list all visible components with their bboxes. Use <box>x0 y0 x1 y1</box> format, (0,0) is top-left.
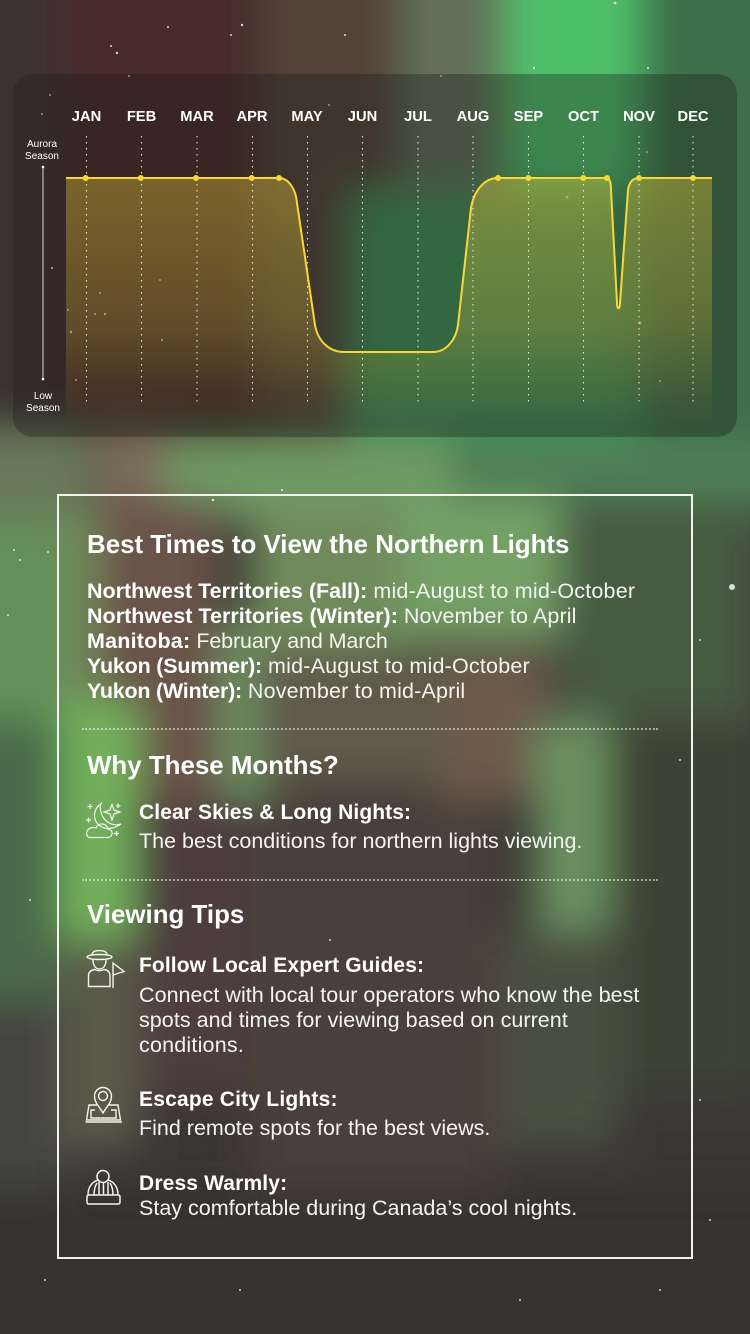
season axis: Low <box>34 391 53 402</box>
icon: map pin <box>86 1086 122 1123</box>
regional viewing dates: Northwest Territories (Winter): November to April <box>87 604 576 628</box>
reason: clear skies: Clear Skies & Long Nights: <box>139 801 411 824</box>
regional viewing dates: Manitoba: February and March <box>87 629 388 653</box>
month guide lines <box>86 136 693 406</box>
month labels: FEB <box>127 109 156 125</box>
heading: viewing tips: Viewing Tips <box>87 901 244 929</box>
heading: why these months: Why These Months? <box>87 752 339 780</box>
tip: dress warmly <box>139 1172 577 1220</box>
data points <box>83 175 696 181</box>
month labels <box>72 109 709 125</box>
icon: winter hat <box>86 1170 121 1205</box>
icon: guide with flag <box>86 950 125 988</box>
tip: follow local expert guides: conditions. <box>139 1033 244 1057</box>
regional viewing dates: Yukon (Summer): mid-August to mid-October <box>87 654 530 678</box>
month labels: APR <box>236 109 268 125</box>
month labels: JUL <box>404 109 432 125</box>
month labels: NOV <box>623 109 655 125</box>
season axis <box>25 139 60 414</box>
area under the curve <box>66 178 712 425</box>
season curve line <box>66 178 712 352</box>
month labels: SEP <box>514 109 543 125</box>
tip: escape city lights: Find remote spots for the best views. <box>139 1116 490 1140</box>
reason: clear skies <box>139 801 582 853</box>
heading: best times: Best Times to View the Northern Lights <box>87 531 569 559</box>
icon: moon, stars and cloud <box>86 802 122 838</box>
tip: follow local expert guides <box>139 954 640 1057</box>
reason: clear skies: The best conditions for northern lights viewing. <box>139 829 582 853</box>
month labels: MAY <box>291 109 323 125</box>
month labels: MAR <box>180 109 214 125</box>
month labels: JUN <box>348 109 377 125</box>
tip: dress warmly: Dress Warmly: <box>139 1172 287 1195</box>
tip: follow local expert guides: Connect with local tour operators who know the best <box>139 983 639 1007</box>
month labels: AUG <box>457 109 489 125</box>
tip: dress warmly: Stay comfortable during Canada’s cool nights. <box>139 1196 577 1220</box>
tip: follow local expert guides: Follow Local Expert Guides: <box>139 954 424 977</box>
month labels: JAN <box>72 109 101 125</box>
season axis: Aurora <box>27 139 57 150</box>
regional viewing dates: Yukon (Winter): November to mid-April <box>87 679 465 703</box>
month labels: OCT <box>568 109 599 125</box>
season axis: Season <box>25 151 59 162</box>
info panel <box>57 494 693 1259</box>
season axis: Season <box>26 403 60 414</box>
regional viewing dates: Northwest Territories (Fall): mid-August to mid-October <box>87 579 635 603</box>
tip: follow local expert guides: spots and times for viewing based on current <box>139 1008 568 1032</box>
chart: aurora season curve <box>25 109 712 414</box>
tip: escape city lights: Escape City Lights: <box>139 1088 338 1111</box>
chart panel <box>13 74 737 437</box>
month labels: DEC <box>677 109 709 125</box>
tip: escape city lights <box>139 1088 490 1140</box>
regional viewing dates <box>87 579 635 703</box>
